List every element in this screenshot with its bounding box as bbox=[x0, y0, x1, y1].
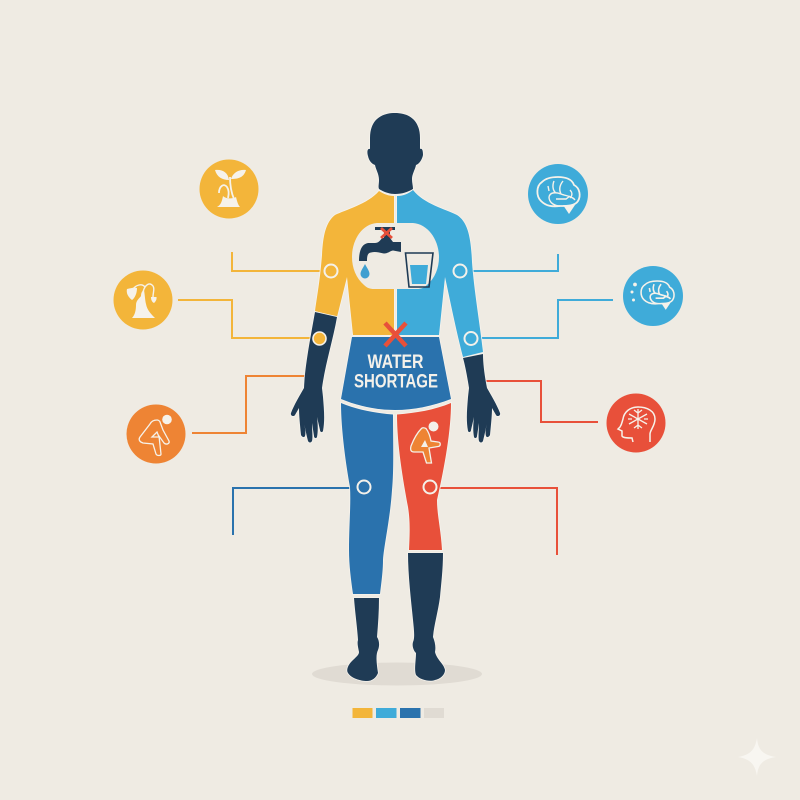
title: water shortage bbox=[354, 351, 438, 392]
icon: faucet with cross bbox=[359, 227, 401, 278]
stem and curl bbox=[219, 177, 234, 199]
left blue leg bbox=[341, 403, 393, 594]
brain stem bbox=[563, 205, 575, 214]
icon: crouching figure on leg bbox=[411, 422, 440, 463]
figure body bbox=[411, 428, 440, 463]
line: right red lower bbox=[440, 488, 557, 555]
line: upper left yellow bbox=[232, 252, 322, 271]
line: right red upper bbox=[486, 381, 598, 422]
right red leg bbox=[397, 403, 451, 550]
head profile bbox=[618, 407, 655, 442]
person outline bbox=[139, 420, 169, 456]
icon: brain in blue circle bbox=[528, 164, 588, 224]
joint: right knee bbox=[424, 480, 436, 494]
title: water shortage: SHORTAGE bbox=[354, 370, 438, 392]
icon: water glass bbox=[406, 253, 433, 287]
line: lower right blue bbox=[480, 300, 613, 338]
swatch: yellow bbox=[352, 708, 372, 718]
icon: wilted plant bbox=[114, 270, 172, 330]
joint markers bbox=[313, 264, 478, 494]
brain folds bbox=[548, 181, 575, 206]
faucet bbox=[359, 227, 401, 261]
sparkle mark bbox=[738, 738, 776, 776]
line: left orange bbox=[192, 376, 306, 433]
title: water shortage: WATER bbox=[368, 351, 424, 373]
mound bbox=[132, 290, 155, 318]
joint: left elbow bbox=[313, 332, 326, 345]
legend swatches bbox=[352, 708, 444, 718]
torso left yellow half bbox=[315, 191, 394, 335]
swatch: grey bbox=[424, 708, 444, 718]
icon: crouching person in orange circle bbox=[126, 404, 186, 464]
brain outline bbox=[537, 177, 580, 206]
connector lines bbox=[178, 252, 613, 555]
dots bbox=[633, 283, 637, 286]
joint: right shoulder bbox=[454, 264, 466, 278]
head and neck bbox=[367, 113, 423, 194]
torso right blue half bbox=[397, 190, 483, 357]
chest cutout bbox=[352, 223, 439, 289]
joint: left shoulder bbox=[324, 264, 338, 278]
figure: human body bbox=[291, 113, 500, 681]
icon: brain with scattered dots bbox=[623, 266, 683, 326]
joint: left knee bbox=[358, 480, 370, 494]
figure inner gap bbox=[421, 440, 428, 447]
icon: head with snowflake bbox=[606, 394, 666, 452]
line: upper right blue bbox=[468, 254, 558, 271]
line: left dark blue bbox=[233, 488, 352, 535]
water drop bbox=[360, 264, 370, 278]
red cross on faucet bbox=[381, 228, 392, 238]
right leaf bbox=[151, 297, 157, 303]
person head bbox=[162, 415, 172, 424]
icon: healthy plant bbox=[200, 160, 258, 218]
mound bbox=[217, 196, 240, 207]
swatch: dark blue bbox=[400, 708, 420, 718]
glass outline bbox=[406, 253, 433, 287]
red cross at waist bbox=[385, 323, 406, 346]
snowflake bbox=[628, 409, 648, 429]
line: lower left yellow bbox=[178, 300, 314, 338]
stem bbox=[661, 303, 670, 310]
right lower leg bbox=[408, 553, 445, 681]
leaves bbox=[215, 170, 246, 180]
ground shadow bbox=[312, 662, 482, 686]
wilted arches bbox=[133, 284, 154, 297]
shorts bbox=[341, 337, 451, 410]
glass water bbox=[410, 265, 428, 284]
right forearm and hand bbox=[463, 354, 500, 442]
swatch: light blue bbox=[376, 708, 396, 718]
brain drawing bbox=[641, 281, 674, 310]
figure head bbox=[428, 422, 438, 432]
left lower leg bbox=[347, 598, 379, 681]
left leaf bbox=[127, 288, 137, 300]
joint: right elbow bbox=[464, 332, 478, 345]
left forearm and hand bbox=[291, 312, 337, 442]
outline and folds bbox=[641, 281, 674, 304]
